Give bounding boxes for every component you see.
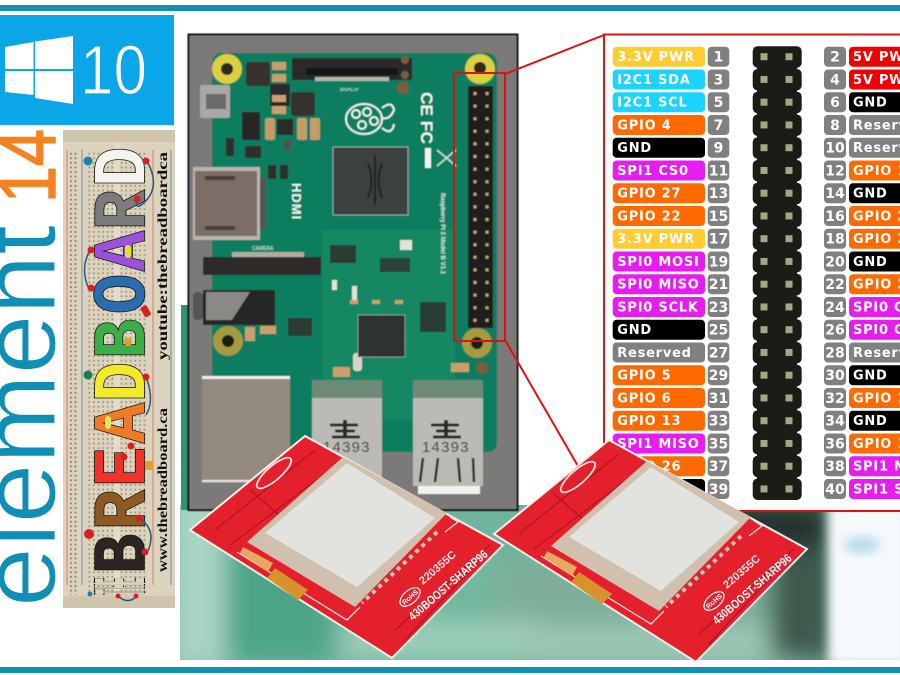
bottom bar [0,667,900,673]
pin row 29-30: 30 [825,368,845,384]
pin row 37-38: 38 [825,459,845,475]
usb port 2 [413,380,483,494]
rohs logo [397,584,423,610]
pin row 5-6: 6 [830,95,840,111]
breadboard letters: THE [82,578,166,595]
logo on pcb [253,453,295,493]
usb port 2: 14393 [422,439,470,456]
wires [84,163,153,600]
rohs logo: RoHS [705,593,724,611]
small smd parts [245,56,488,377]
label: display: DISPLAY [340,87,359,92]
pin row 35-36: 35 [709,436,728,452]
centre groove [114,142,120,596]
pin row 31-32: 31 [709,391,728,407]
display connector [292,58,412,81]
pin row 35-36: SPI1 MISO [617,437,700,452]
background strip left of board [181,305,188,510]
pin row 13-14: 13 [709,186,728,202]
pin row 23-24: SPI0 SCLK [617,300,699,315]
camera connector [203,252,321,275]
display glass [569,467,739,591]
pin row 35-36: 36 [825,436,845,452]
header spine [757,47,797,499]
pin row 19-20: 20 [825,254,845,270]
mounting hole bottom right [462,328,492,358]
panel: breadboard logo [63,130,175,608]
pin row 37-38 [613,456,900,477]
pin row 3-4: 4 [830,72,840,88]
pin row 13-14: GPIO 27 [617,187,681,202]
leds [84,156,153,598]
pin row 3-4: I2C1 SDA [617,73,691,88]
logo on pcb [557,457,599,497]
breadboard letters: B [83,319,167,359]
display glass [265,463,435,587]
pin row 11-12: 12 [825,163,845,179]
power rail dots [70,150,79,595]
pin row 39-40: 40 [825,482,845,498]
breadboard letters: A [83,402,167,443]
icon: windows logo [5,36,73,104]
pin row 31-32: 32 [825,391,845,407]
pin row 1-2: 1 [714,50,723,66]
pin row 5-6: I2C1 SCL [617,96,687,111]
mounting hole bottom left [213,326,243,356]
pcb traces [519,454,794,644]
pin row 31-32: GPIO 6 [617,391,671,406]
pin row 7-8: GPIO 4 [617,118,671,133]
pin row 29-30: GPIO 5 [617,369,671,384]
pin row 39-40: GND [617,482,652,497]
flex cable light [544,551,577,576]
rohs logo [701,588,727,614]
pcb light zone [322,230,455,420]
pin row 25-26: GND [617,323,652,338]
pin row 29-30 [613,365,900,386]
board name: 430BOOST-SHARP96 [406,547,491,623]
pin row 9-10: 9 [714,141,723,157]
pin row 7-8: 8 [830,118,840,134]
pin row 11-12: 11 [709,163,728,179]
breadboard letters: B [83,534,167,574]
rohs logo: RoHS [401,589,420,607]
display module left [190,436,503,658]
breadboard letters: D [83,147,167,187]
pin row 19-20 [613,251,900,272]
windows 10 tile [0,15,174,125]
pcb board [212,53,497,452]
pin row 1-2: 2 [830,50,840,66]
pin row 21-22: 21 [709,277,728,293]
pin row 17-18 [613,228,900,250]
pin row 23-24 [613,296,900,318]
pin row 3-4 [613,69,900,90]
broadcom soc [333,147,408,215]
pin row 27-28: 28 [825,345,845,361]
pin row 33-34: GND [853,414,888,429]
pin row 11-12: SPI1 CS0 [617,164,689,179]
pin row 25-26 [613,319,900,341]
mounting hole top left [212,54,242,84]
pin row 17-18: 17 [709,232,728,248]
pin row 27-28 [613,342,900,363]
connector arrow top [505,35,604,74]
pin row 29-30: 29 [709,368,728,384]
breadboard end labels [63,130,175,142]
pin row 9-10: GND [617,141,652,156]
usb port 1: 14393 [323,439,371,456]
display frame [247,457,447,607]
pin row 9-10 [613,137,900,159]
pin row 21-22 [613,274,900,295]
pin row 23-24: 24 [825,300,845,316]
connector arrow bottom [505,340,604,511]
pin row 33-34: 34 [825,414,845,430]
pin row 27-28: Reserved [617,346,692,361]
pin row 19-20: 19 [709,254,728,270]
pin row 35-36 [613,433,900,454]
breadboard letters: O [83,274,167,314]
raspberry logo [346,104,394,134]
pin row 7-8 [613,114,900,136]
pin row 39-40: 39 [709,482,728,498]
flex cable [267,568,308,600]
pcb traces [215,450,490,640]
pin row 17-18: 18 [825,232,845,248]
ethernet port [202,376,290,483]
pin row 37-38: GPIO 26 [617,460,681,475]
lan chip [358,315,405,357]
label: camera: CAMERA [252,246,274,252]
pin row 23-24: 23 [709,300,728,316]
windows version: 10 [80,31,147,109]
hdmi connector [193,167,266,240]
pin row 33-34: GPIO 13 [617,414,681,429]
pin row 15-16 [613,205,900,227]
breadboard letters: E [83,447,167,487]
part number: 220355C [721,553,763,591]
blurred background photo [180,505,900,660]
pin row 5-6: GND [853,96,888,111]
part number: 220355C [417,549,459,587]
flex cable [571,572,612,604]
pin row 15-16: GPIO 22 [617,209,681,224]
breadboard letters: R [83,189,167,230]
pin row 39-40 [613,478,900,500]
pin row 29-30: GND [853,369,888,384]
pin row 5-6 [613,92,900,113]
white silk outline [541,521,762,624]
pin row 7-8: 7 [714,118,723,134]
breadboard letters: R [83,489,167,530]
pin row 13-14 [613,183,900,204]
pin row 33-34 [613,410,900,432]
pin row 15-16: 15 [709,209,728,225]
pin row 19-20: GND [853,255,888,270]
white silk outline [237,517,458,620]
pin row 19-20: SPI0 MOSI [617,255,700,270]
display frame [551,461,751,611]
panel: gpio pinout [604,34,900,511]
pin row 37-38: 37 [709,459,728,475]
regulatory marks: CE FC [417,92,436,144]
audio jack [193,290,275,325]
pin row 17-18: 3.3V PWR [617,232,695,247]
pin row 25-26: 26 [825,323,845,339]
website text: www.thebreadboard.ca [156,408,171,572]
gpio header on board [468,86,493,328]
pin row 33-34: 33 [709,414,728,430]
recycle mark [425,148,456,168]
breadboard letters [82,147,167,595]
pin row 1-2: 3.3V PWR [617,50,695,65]
pin row 31-32 [613,387,900,409]
top bar [0,5,900,11]
pin row 15-16: 16 [825,209,845,225]
pin row 9-10: 10 [825,141,845,157]
pin row 1-2 [613,46,900,68]
component dots [88,150,146,595]
pin row 21-22: 22 [825,277,845,293]
header pads [362,532,437,603]
pin row 21-22: SPI0 MISO [617,278,700,293]
pin row 13-14: 14 [825,186,845,202]
usb port 1 [312,380,382,486]
pin row 3-4: 3 [714,72,723,88]
board silk text: Raspberry Pi 2 Model B V1.1 [439,193,445,275]
micro usb [200,85,230,118]
inductors and capacitors top left [226,62,320,179]
highlight rectangle around gpio header [454,73,505,341]
pin row 27-28: 27 [709,345,728,361]
pin row 11-12 [613,160,900,181]
breadboard letters: D [83,362,167,402]
panel: raspberry pi photo [188,34,518,510]
label: hdmi: HDMI [289,183,304,220]
breadboard letters: A [83,230,167,271]
board name: 430BOOST-SHARP96 [710,551,795,627]
rail lines [67,150,153,585]
display module right [494,440,807,662]
youtube text: youtube:thebreadboardca [156,152,171,360]
pin row 5-6: 5 [714,95,723,111]
pin row 13-14: GND [853,187,888,202]
pin row 25-26: 25 [709,323,728,339]
flex cable light [240,547,273,572]
header pads [666,536,741,607]
mounting hole top right [465,54,495,84]
